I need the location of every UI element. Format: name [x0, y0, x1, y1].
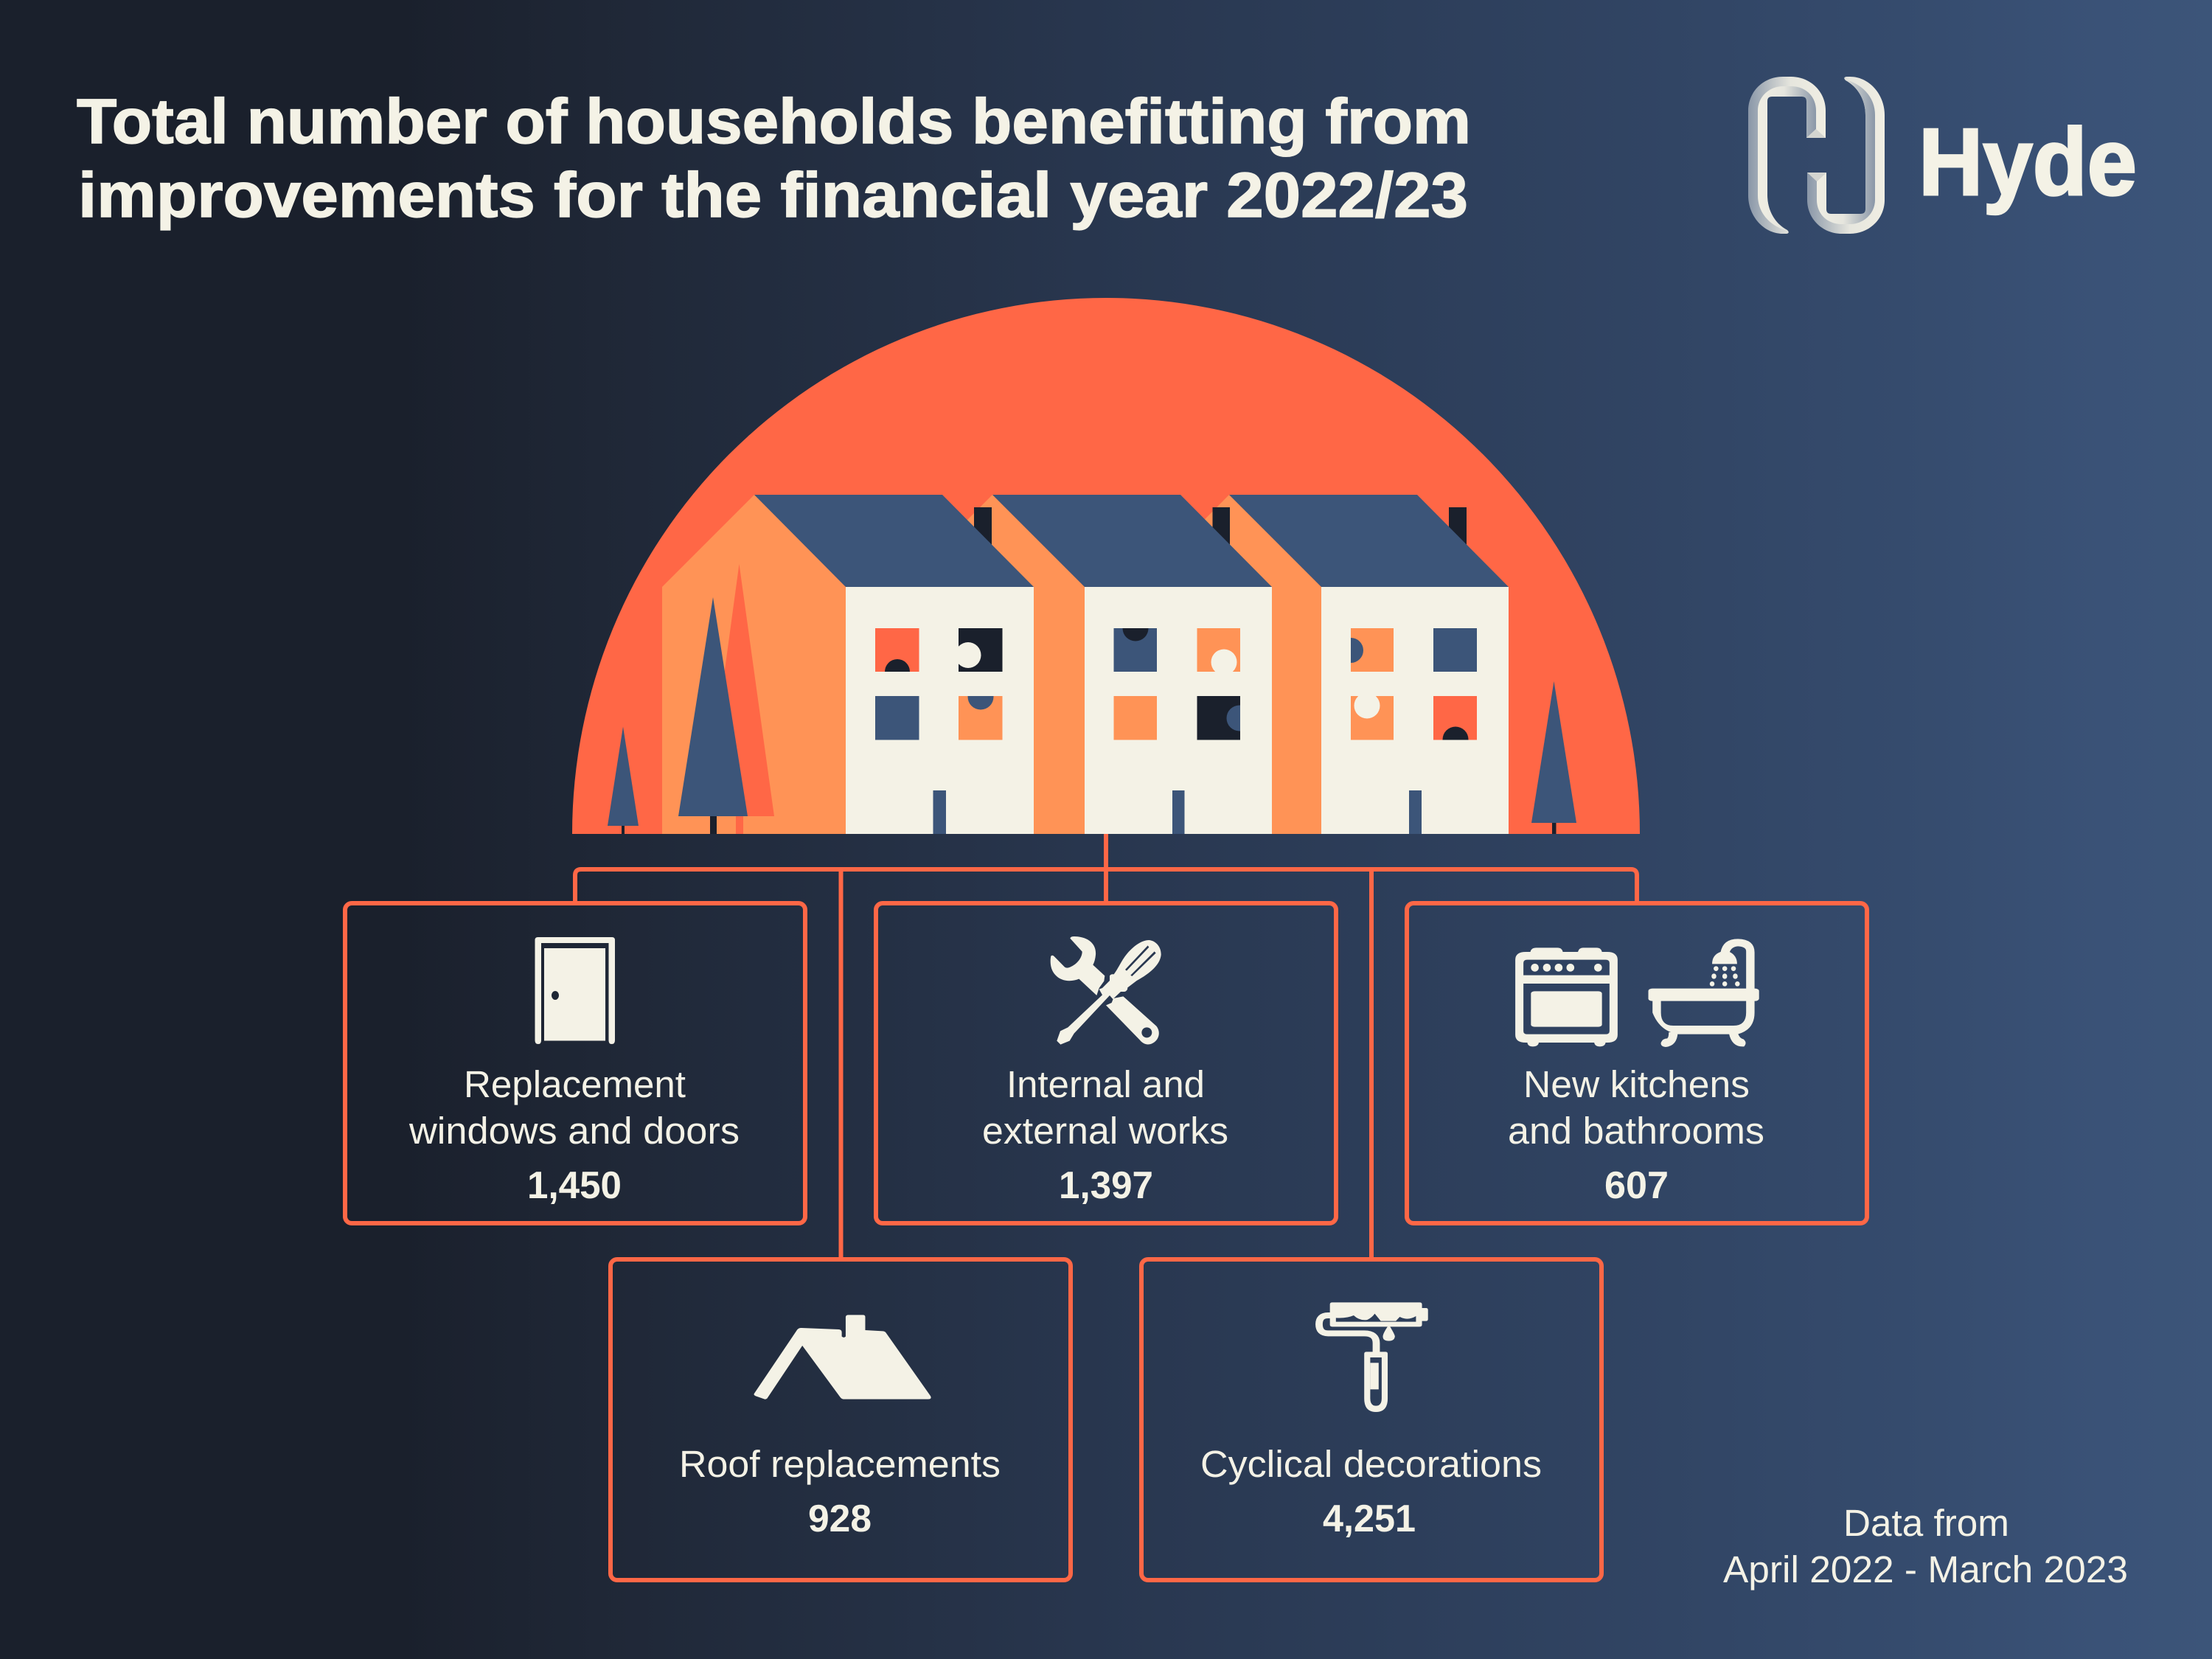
blue roofs: [754, 495, 1509, 587]
logo wordmark: Hyde: [1919, 109, 2137, 215]
label: New kitchens: [1523, 1063, 1750, 1105]
logo: Hyde: [1748, 77, 2137, 234]
label: windows and doors: [408, 1110, 740, 1152]
logo mark: [1748, 77, 1885, 234]
semicircle sun: [572, 298, 1640, 834]
icon: roof: [754, 1315, 931, 1399]
label: [408, 1063, 740, 1152]
icon: bath and shower: [1649, 939, 1759, 1047]
title: improvements for the financial year 2022/23: [78, 160, 1468, 231]
terraced houses illustration: [608, 495, 1576, 834]
value: 1,397: [1059, 1164, 1153, 1207]
data source note: [1723, 1502, 2128, 1590]
doors: [933, 790, 1422, 834]
trees: [608, 564, 1576, 834]
title: Total number of households benefitting from: [77, 86, 1471, 157]
panel: internal and external works: [876, 903, 1336, 1223]
icon: door: [535, 937, 615, 1044]
panel: new kitchens and bathrooms: [1407, 903, 1867, 1223]
label: Cyclical decorations: [1200, 1443, 1542, 1485]
label: Roof replacements: [679, 1443, 1001, 1485]
value: 928: [808, 1498, 872, 1540]
label: Replacement: [464, 1063, 686, 1105]
label: [1508, 1063, 1764, 1152]
white house walls: [846, 587, 1509, 834]
chimneys: [974, 507, 1467, 566]
label: [982, 1063, 1228, 1152]
value: 4,251: [1323, 1498, 1416, 1540]
panel: cyclical decorations: [1141, 1259, 1601, 1580]
icon: oven: [1515, 947, 1618, 1046]
label: and bathrooms: [1508, 1110, 1764, 1152]
windows: house 1: [875, 628, 1003, 740]
panel: replacement windows and doors: [345, 903, 805, 1223]
data source note: April 2022 - March 2023: [1723, 1548, 2128, 1590]
connector lines: [575, 834, 1637, 1257]
windows: house 3: [1351, 628, 1477, 740]
panel: roof replacements: [611, 1259, 1071, 1580]
icon: paint roller: [1319, 1302, 1428, 1412]
orange gables: [662, 495, 1321, 834]
windows: house 2: [1113, 628, 1240, 740]
value: 607: [1604, 1164, 1669, 1207]
icon: spanner and screwdriver: [1051, 936, 1161, 1045]
value: 1,450: [527, 1164, 622, 1207]
data source note: Data from: [1843, 1502, 2009, 1544]
label: Internal and: [1006, 1063, 1205, 1105]
title: [77, 86, 1471, 231]
label: external works: [982, 1110, 1228, 1152]
